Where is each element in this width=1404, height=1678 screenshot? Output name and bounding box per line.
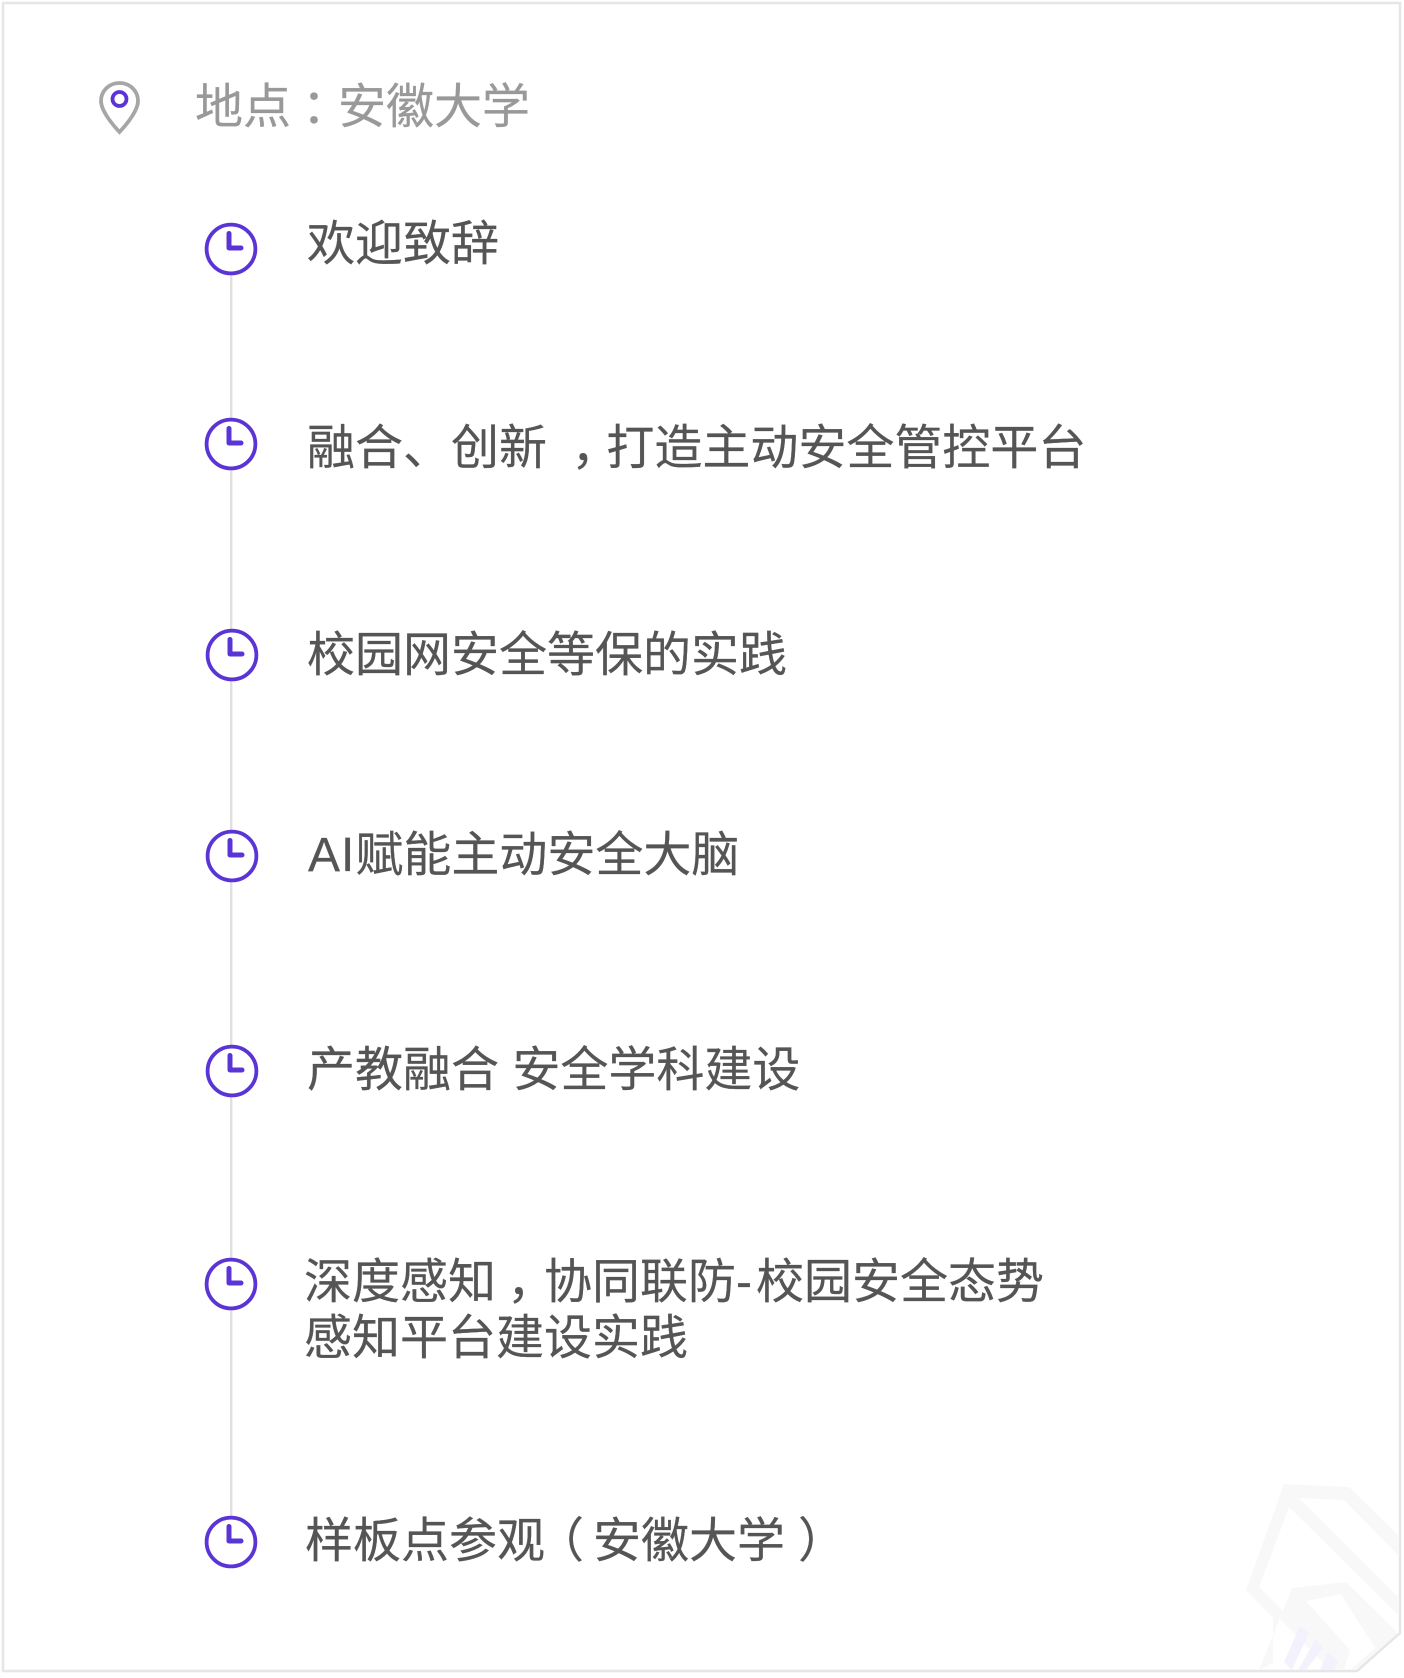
icon: clock 5 <box>206 1044 258 1098</box>
icon: location pin <box>99 81 140 135</box>
agenda item 4: AI赋能主动安全大脑 <box>308 829 739 882</box>
agenda item 3: 校园网安全等保的实践 <box>307 629 787 682</box>
agenda item 7: 样板点参观 安徽大学 <box>305 1515 785 1568</box>
icon: clock 3 <box>206 628 258 682</box>
icon: clock 4 <box>206 830 258 882</box>
timeline connector <box>230 270 232 1522</box>
agenda item 6: 深度感知 协同联防-校园安全态势 <box>304 1256 1044 1309</box>
agenda item 6: ， <box>507 1256 555 1309</box>
agenda item 6: 感知平台建设实践 <box>304 1312 688 1365</box>
agenda item 7: ） <box>798 1515 846 1568</box>
watermark: pencil icon <box>1246 1484 1398 1670</box>
agenda item 5: 产教融合 安全学科建设 <box>307 1044 800 1097</box>
agenda item 2: 融合、创新 打造主动安全管控平台 <box>307 422 1086 475</box>
icon: clock 7 <box>204 1516 258 1568</box>
agenda item 7: （ <box>536 1515 584 1568</box>
icon: clock 1 <box>204 222 258 276</box>
heading: location: ： <box>302 81 350 134</box>
agenda item 2: ， <box>571 422 619 475</box>
icon: clock 6 <box>204 1258 258 1310</box>
agenda item 6 <box>304 1256 1044 1365</box>
icon: clock 2 <box>204 418 258 470</box>
agenda item 1: 欢迎致辞 <box>307 218 499 271</box>
heading: location: 地点 安徽大学 <box>195 81 530 134</box>
